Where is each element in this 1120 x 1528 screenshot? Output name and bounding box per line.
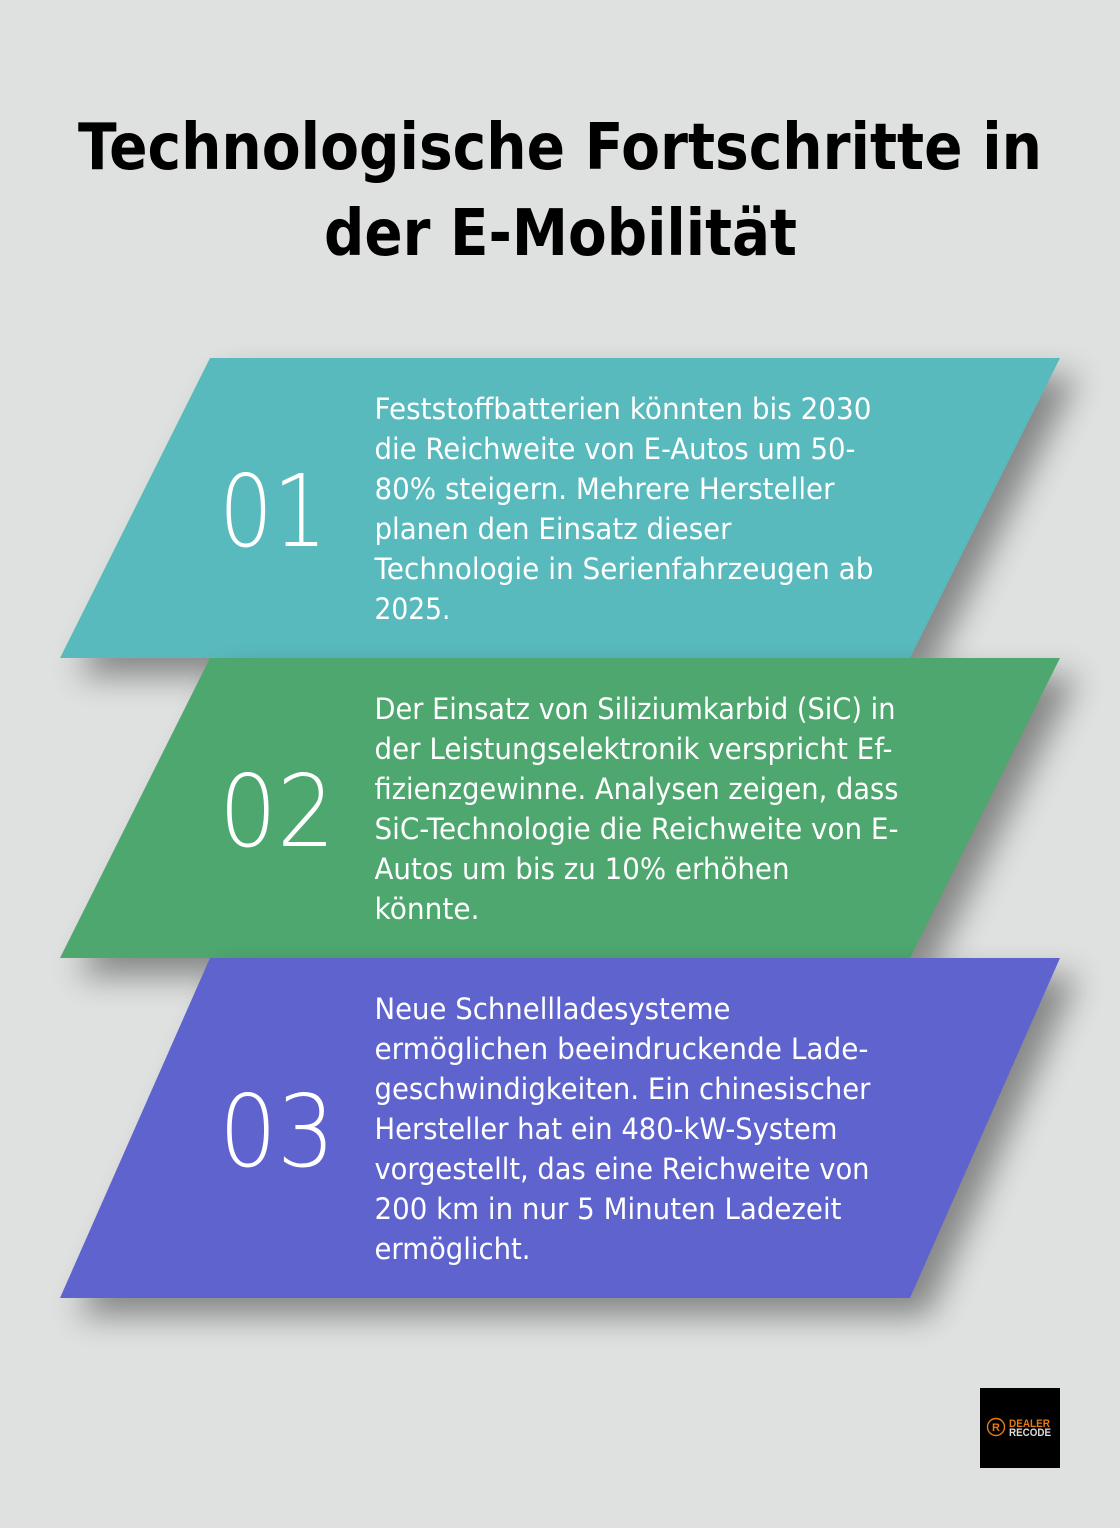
panel: 01 solid-state batteries: 01 — [219, 453, 327, 570]
panel: 02 silicon carbide: 02 — [219, 753, 335, 870]
panel: 03 fast charging: 200 km in nur 5 Minuten Ladezeit — [374, 1192, 842, 1226]
panel: 03 fast charging: Hersteller hat ein 480-kW-System — [374, 1112, 838, 1146]
panel: 03 fast charging: geschwindigkeiten. Ein chinesischer — [374, 1072, 871, 1106]
panel: 03 fast charging: Neue Schnellladesysteme — [374, 992, 730, 1026]
panel: 03 fast charging: ermöglicht. — [374, 1232, 530, 1266]
panel: 02 silicon carbide: der Leistungselektronik verspricht Ef- — [374, 732, 892, 766]
panel: 02 silicon carbide: Autos um bis zu 10% erhöhen — [374, 852, 790, 886]
panel: 01 solid-state batteries: planen den Einsatz dieser — [374, 512, 732, 546]
panel: 03 fast charging: vorgestellt, das eine Reichweite von — [374, 1152, 870, 1186]
logo: Dealer Recode — [980, 1388, 1060, 1468]
panel: 03 fast charging: ermöglichen beeindruckende Lade- — [374, 1032, 868, 1066]
panel: 01 solid-state batteries: Technologie in Serienfahrzeugen ab — [374, 552, 874, 586]
logo: Dealer Recode: R — [992, 1422, 1000, 1434]
panel: 01 solid-state batteries: 80% steigern. Mehrere Hersteller — [374, 472, 835, 506]
panel: 03 fast charging — [60, 958, 1078, 1316]
panel: 02 silicon carbide: könnte. — [374, 892, 480, 926]
panel: 03 fast charging: 03 — [219, 1073, 335, 1190]
title — [78, 111, 1042, 271]
panel: 02 silicon carbide: fizienzgewinne. Analysen zeigen, dass — [374, 772, 898, 806]
logo: Dealer Recode: RECODE — [1009, 1427, 1051, 1439]
panel: 02 silicon carbide: SiC-Technologie die Reichweite von E- — [374, 812, 898, 846]
logo: Dealer Recode: DEALER — [1009, 1418, 1050, 1430]
panel: 01 solid-state batteries: 2025. — [374, 592, 450, 626]
panel: 02 silicon carbide — [60, 658, 1078, 976]
panel: 01 solid-state batteries — [60, 358, 1078, 676]
panel: 02 silicon carbide: Der Einsatz von Siliziumkarbid (SiC) in — [374, 692, 896, 726]
panel: 01 solid-state batteries: die Reichweite von E-Autos um 50- — [374, 432, 856, 466]
panel: 01 solid-state batteries: Feststoffbatterien könnten bis 2030 — [374, 392, 872, 426]
title: der E-Mobilität — [324, 197, 797, 271]
